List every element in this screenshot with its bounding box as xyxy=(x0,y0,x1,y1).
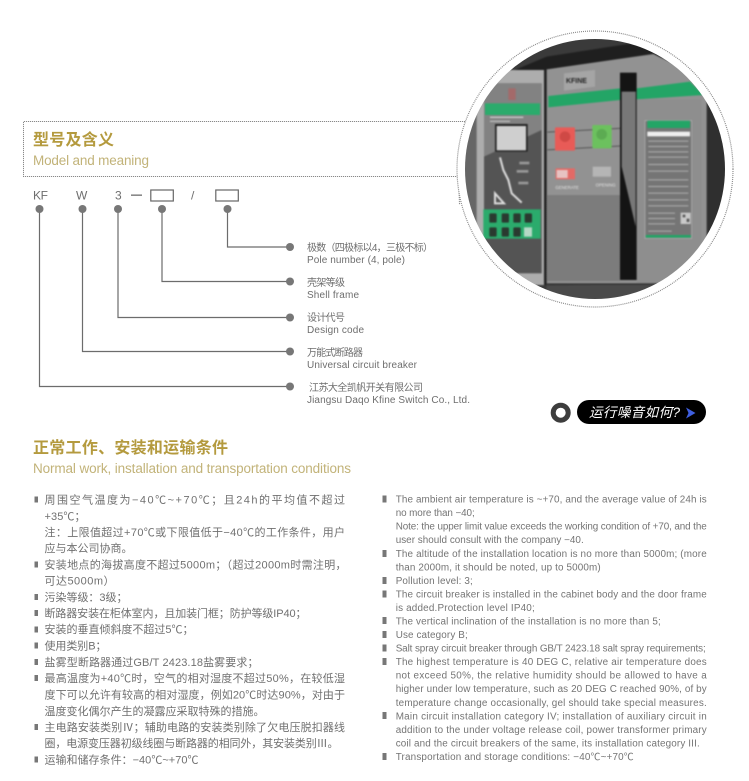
Chinese list lines: 度下可以允许有较高的相对湿度，例如20℃时达90%，对由于 xyxy=(44,688,345,702)
English list lines: The circuit breaker is installed in the cabinet body and the door frame xyxy=(396,590,707,600)
Chinese list lines: 温度变化偶尔产生的凝露应采取特殊的措施。 xyxy=(44,704,264,718)
pill button: noise question xyxy=(577,400,706,424)
English list lines: Note: the upper limit value exceeds the working condition of +70, and the xyxy=(396,522,707,532)
English list lines: not exceed 50%, the relative humidity should be allowed to have a xyxy=(396,670,707,682)
label: design code: Design code xyxy=(307,325,364,336)
Chinese list lines: 断路器安装在柜体室内，且加装门框；防护等级IP40； xyxy=(44,606,306,620)
Chinese list lines: 可达5000m） xyxy=(44,574,114,588)
heading: normal work conditions xyxy=(33,438,351,476)
leader lines xyxy=(40,209,290,386)
English list lines: coil and the circuit breakers of the same, its installation category III. xyxy=(396,738,700,750)
label: shell frame xyxy=(307,276,359,301)
Chinese list lines: 安装的垂直倾斜度不超过5℃； xyxy=(44,622,194,636)
dotted callout frame linking heading to photo xyxy=(24,109,473,205)
Chinese list lines: 安装地点的海拔高度不超过5000m；（超过2000m时需注明， xyxy=(44,558,346,572)
English list lines: Pollution level: 3; xyxy=(396,576,473,587)
label: universal circuit breaker: Universal circuit breaker xyxy=(307,360,418,371)
model code characters: / xyxy=(191,188,195,202)
heading: model and meaning: Model and meaning xyxy=(33,153,149,168)
Chinese list lines: 使用类别B； xyxy=(44,638,106,652)
label: pole number: 极数（四极标以4，三极不标） xyxy=(307,241,433,254)
label: manufacturer: Jiangsu Daqo Kfine Switch Co., Ltd. xyxy=(307,395,470,406)
English list lines: temperature change occasionally, gel should take special measures. xyxy=(396,698,707,709)
code placeholder boxes xyxy=(151,190,238,201)
heading: model and meaning: 型号及含义 xyxy=(33,130,114,149)
model code characters xyxy=(33,188,195,202)
English list lines: is added.Protection level IP40; xyxy=(396,603,535,614)
circular product photo of circuit breaker: OPENING xyxy=(596,183,616,188)
label: universal circuit breaker xyxy=(307,346,418,371)
model code diagram xyxy=(33,188,470,406)
label: design code xyxy=(307,311,364,336)
Chinese list lines: +35℃； xyxy=(44,511,86,523)
Chinese list lines: 盐雾型断路器通过GB/T 2423.18盐雾要求； xyxy=(44,655,258,669)
English list lines: The highest temperature is 40 DEG C, relative air temperature does xyxy=(396,657,707,668)
English list bullets xyxy=(382,496,386,760)
Chinese list lines xyxy=(44,492,346,766)
photo button captions: GENERATE xyxy=(555,185,579,190)
Chinese list lines: 注：上限值超过+70℃或下限值低于−40℃的工作条件，用户 xyxy=(44,525,345,539)
English list lines: than 2000m, it should be noted, up to 5000m) xyxy=(396,562,601,574)
English list lines: The ambient air temperature is ~+70, and the average value of 24h is xyxy=(396,494,707,506)
Chinese list lines: 污染等级：3级； xyxy=(44,590,128,604)
heading: normal work conditions: 正常工作、安装和运输条件 xyxy=(33,438,228,457)
pill button: noise question: 运行噪音如何? xyxy=(589,405,680,420)
model code characters: W xyxy=(76,188,88,202)
Chinese list lines: 圈，电源变压器初级线圈与断路器的相同外，其安装类别Ⅲ。 xyxy=(44,736,338,750)
English list lines: addition to the under voltage release coil, power transformer primary xyxy=(396,725,707,736)
English list lines: user should consult with the company −40. xyxy=(396,535,584,546)
Chinese list lines: 周围空气温度为−40℃~+70℃；且24h的平均值不超过 xyxy=(44,492,345,506)
Chinese list lines: 主电路安装类别Ⅳ；辅助电路的安装类别除了欠电压脱扣器线 xyxy=(44,720,345,734)
Chinese list lines: 应与本公司协商。 xyxy=(44,541,132,555)
Chinese list lines: 最高温度为+40℃时，空气的相对湿度不超过50%，在较低湿 xyxy=(44,671,345,685)
English list lines: The altitude of the installation location is no more than 5000m; (more xyxy=(396,549,707,560)
label: manufacturer: 江苏大全凯帆开关有限公司 xyxy=(309,381,423,394)
English list lines: higher under low temperature, such as 20 DEG C reached 90%, of by xyxy=(396,684,707,695)
label: pole number: Pole number (4, pole) xyxy=(307,255,405,266)
heading: normal work conditions: Normal work, installation and transportation conditions xyxy=(33,461,351,476)
English list lines: Transportation and storage conditions: −40℃~+70℃ xyxy=(396,752,634,763)
text block: Chinese conditions list xyxy=(34,492,346,766)
English list lines: no more than −40; xyxy=(396,508,475,519)
label: manufacturer xyxy=(307,381,470,406)
Chinese list lines: 运输和储存条件：−40℃~+70℃ xyxy=(44,752,198,766)
label: design code: 设计代号 xyxy=(307,311,345,324)
label: pole number xyxy=(307,241,433,266)
model code characters: 3 xyxy=(115,188,122,202)
English list lines: The vertical inclination of the installation is no more than 5; xyxy=(396,616,661,628)
Chinese list bullets xyxy=(34,496,38,762)
label: shell frame: Shell frame xyxy=(307,290,359,301)
English list lines: Salt spray circuit breaker through GB/T 2423.18 salt spray requirements; xyxy=(396,644,706,654)
photo brand mark: KFINE xyxy=(566,78,587,85)
English list lines xyxy=(396,494,707,763)
circular product photo of circuit breaker xyxy=(453,27,740,313)
label: shell frame: 壳架等级 xyxy=(307,276,345,289)
icon: ring marker xyxy=(553,405,568,420)
leader line dots xyxy=(36,205,294,390)
model code characters: KF xyxy=(33,188,48,202)
label: universal circuit breaker: 万能式断路器 xyxy=(307,346,363,359)
text block: English conditions list xyxy=(382,494,707,763)
heading: model and meaning xyxy=(33,130,149,168)
English list lines: Use category B; xyxy=(396,630,468,641)
English list lines: Main circuit installation category IV; installation of auxiliary circuit in xyxy=(396,712,707,722)
